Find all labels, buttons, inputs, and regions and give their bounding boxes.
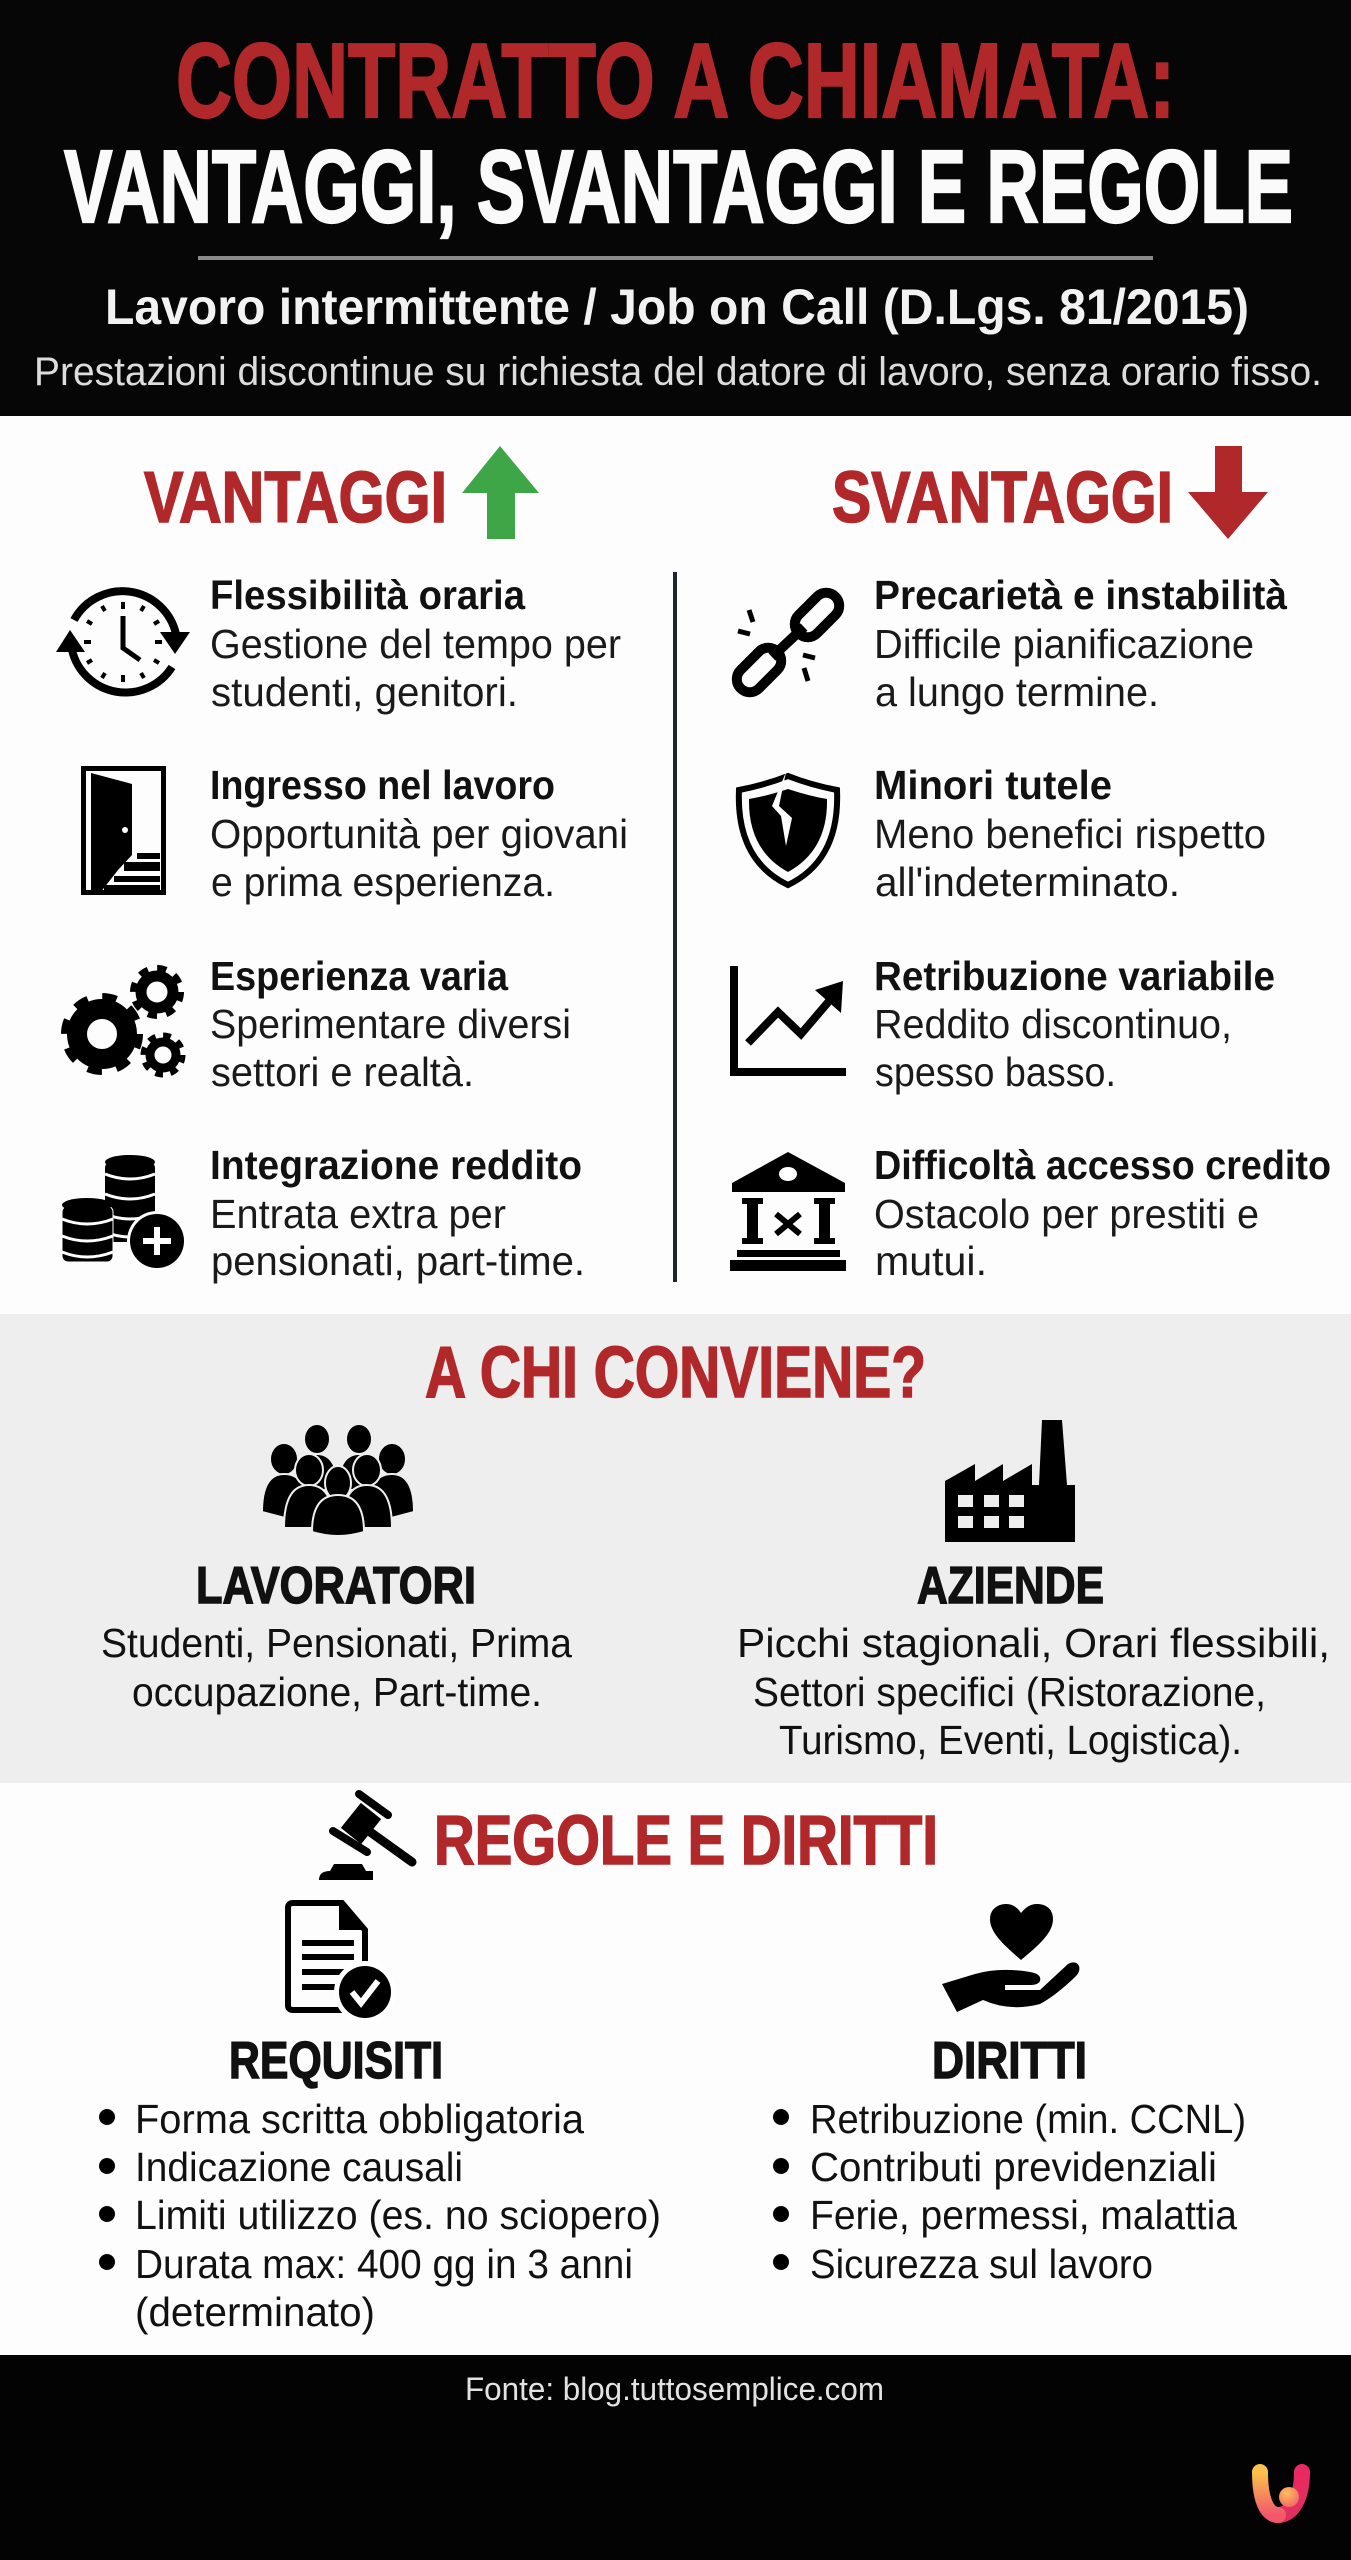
heading: requisiti: REQUISITI [229, 2032, 443, 2090]
heading: vantaggi: VANTAGGI [144, 458, 447, 538]
text: esperienza varia: settori e realtà. [211, 1049, 474, 1095]
text: minori tutele: Minori tutele [874, 762, 1112, 808]
text: integrazione reddito: pensionati, part-time. [211, 1238, 585, 1284]
heading: diritti: DIRITTI [932, 2032, 1087, 2090]
list: requisiti: Durata max: 400 gg in 3 anni [135, 2241, 633, 2287]
text: esperienza varia: Sperimentare diversi [210, 1001, 571, 1047]
text: aziende: Picchi stagionali, Orari flessibili, [737, 1620, 1330, 1666]
text: minori tutele [874, 762, 1266, 905]
text: esperienza varia [210, 953, 571, 1095]
list: requisiti: Indicazione causali [135, 2144, 463, 2190]
text: retribuzione variabile: Reddito discontinuo, [874, 1001, 1232, 1047]
text: lavoratori [101, 1620, 572, 1715]
list: diritti: Contributi previdenziali [810, 2144, 1217, 2190]
text: retribuzione variabile: spesso basso. [875, 1049, 1116, 1095]
icon: factory [945, 1420, 1075, 1542]
text: flessibilità oraria: Gestione del tempo per [210, 621, 621, 667]
heading: svantaggi: SVANTAGGI [832, 458, 1173, 538]
icon: heart in hand [942, 1904, 1079, 2012]
text: flessibilità oraria: Flessibilità oraria [210, 572, 526, 618]
icon: document with check [288, 1903, 396, 2023]
text: precarietà [874, 572, 1287, 715]
item: minori tutele [739, 762, 1266, 905]
text: minori tutele: Meno benefici rispetto [874, 811, 1266, 857]
text: flessibilità oraria [210, 572, 621, 715]
panel: regole e diritti [99, 1794, 1246, 2335]
text: lavoratori: Studenti, Pensionati, Prima [101, 1620, 572, 1666]
text: aziende: Settori specifici (Ristorazione, [753, 1669, 1266, 1715]
heading: aziende: AZIENDE [917, 1557, 1104, 1615]
text: flessibilità oraria: studenti, genitori. [211, 669, 518, 715]
icon: bank with cross [730, 1152, 846, 1271]
item: precarietà [731, 572, 1287, 715]
text: minori tutele: all'indeterminato. [875, 859, 1180, 905]
text: lavoratori: occupazione, Part-time. [132, 1669, 542, 1715]
text: ingresso nel lavoro: Opportunità per giovani [210, 811, 628, 857]
icon: clock [56, 591, 190, 693]
item: retribuzione variabile [734, 953, 1275, 1095]
text: precarietà: Difficile pianificazione [874, 621, 1254, 667]
icon: broken chain [731, 587, 845, 698]
panel: a chi conviene [0, 1314, 1351, 1783]
list: diritti [773, 2096, 1246, 2287]
icon: broken shield [739, 772, 837, 885]
list: requisiti: Limiti utilizzo (es. no sciopero) [135, 2192, 661, 2238]
heading: a chi conviene: A CHI CONVIENE? [425, 1333, 926, 1413]
list: diritti: Sicurezza sul lavoro [810, 2241, 1153, 2287]
text: difficoltà accesso credito: mutui. [875, 1238, 987, 1284]
text: retribuzione variabile: Retribuzione variabile [874, 953, 1275, 999]
icon: coins with plus [62, 1155, 187, 1271]
text: precarietà: a lungo termine. [875, 669, 1159, 715]
text: precarietà: Precarietà e instabilità [874, 572, 1287, 618]
text: esperienza varia: Esperienza varia [210, 953, 509, 999]
list: diritti: Ferie, permessi, malattia [810, 2192, 1237, 2238]
heading: lavoratori: LAVORATORI [196, 1557, 476, 1615]
icon: gavel [319, 1794, 412, 1880]
item: flessibilità oraria [56, 572, 621, 715]
text: aziende: Turismo, Eventi, Logistica). [779, 1717, 1242, 1763]
text: ingresso nel lavoro: Ingresso nel lavoro [210, 762, 555, 808]
panel: vantaggi [56, 446, 628, 1284]
panel: footer [0, 2355, 1351, 2560]
text: ingresso nel lavoro [210, 762, 628, 905]
item: esperienza varia [66, 953, 571, 1095]
text: integrazione reddito [210, 1142, 585, 1284]
panel: header [0, 0, 1351, 416]
icon: logo [1260, 2472, 1302, 2515]
list: requisiti [99, 2096, 661, 2335]
subtitle: Lavoro intermittente / Job on Call (D.Lgs. 81/2015) [105, 279, 1249, 335]
item: difficoltà accesso credito [730, 1142, 1331, 1284]
icon: group of people [262, 1424, 414, 1536]
text: retribuzione variabile [874, 953, 1275, 1095]
icon: red down arrow [1188, 446, 1268, 539]
text: ingresso nel lavoro: e prima esperienza. [211, 859, 555, 905]
list: requisiti: Forma scritta obbligatoria [135, 2096, 584, 2142]
icon: door and stairs [84, 768, 164, 895]
panel: svantaggi [730, 446, 1331, 1284]
icon: line chart [734, 966, 846, 1072]
icon: green up arrow [462, 446, 539, 539]
item: integrazione reddito [62, 1142, 585, 1284]
text: difficoltà accesso credito: Ostacolo per prestiti e [874, 1191, 1259, 1237]
text: aziende [737, 1620, 1330, 1763]
list: diritti: Retribuzione (min. CCNL) [810, 2096, 1246, 2142]
text: integrazione reddito: Integrazione reddito [210, 1142, 582, 1188]
description: Prestazioni discontinue su richiesta del datore di lavoro, senza orario fisso. [34, 350, 1322, 394]
source line: Fonte: blog.tuttosemplice.com [465, 2371, 884, 2407]
item: ingresso nel lavoro [84, 762, 628, 905]
text: integrazione reddito: Entrata extra per [210, 1191, 506, 1237]
text: difficoltà accesso credito [874, 1142, 1331, 1284]
icon: gears [66, 969, 182, 1074]
heading: regole e diritti: REGOLE E DIRITTI [434, 1801, 938, 1879]
list: requisiti: (determinato) [135, 2289, 375, 2335]
